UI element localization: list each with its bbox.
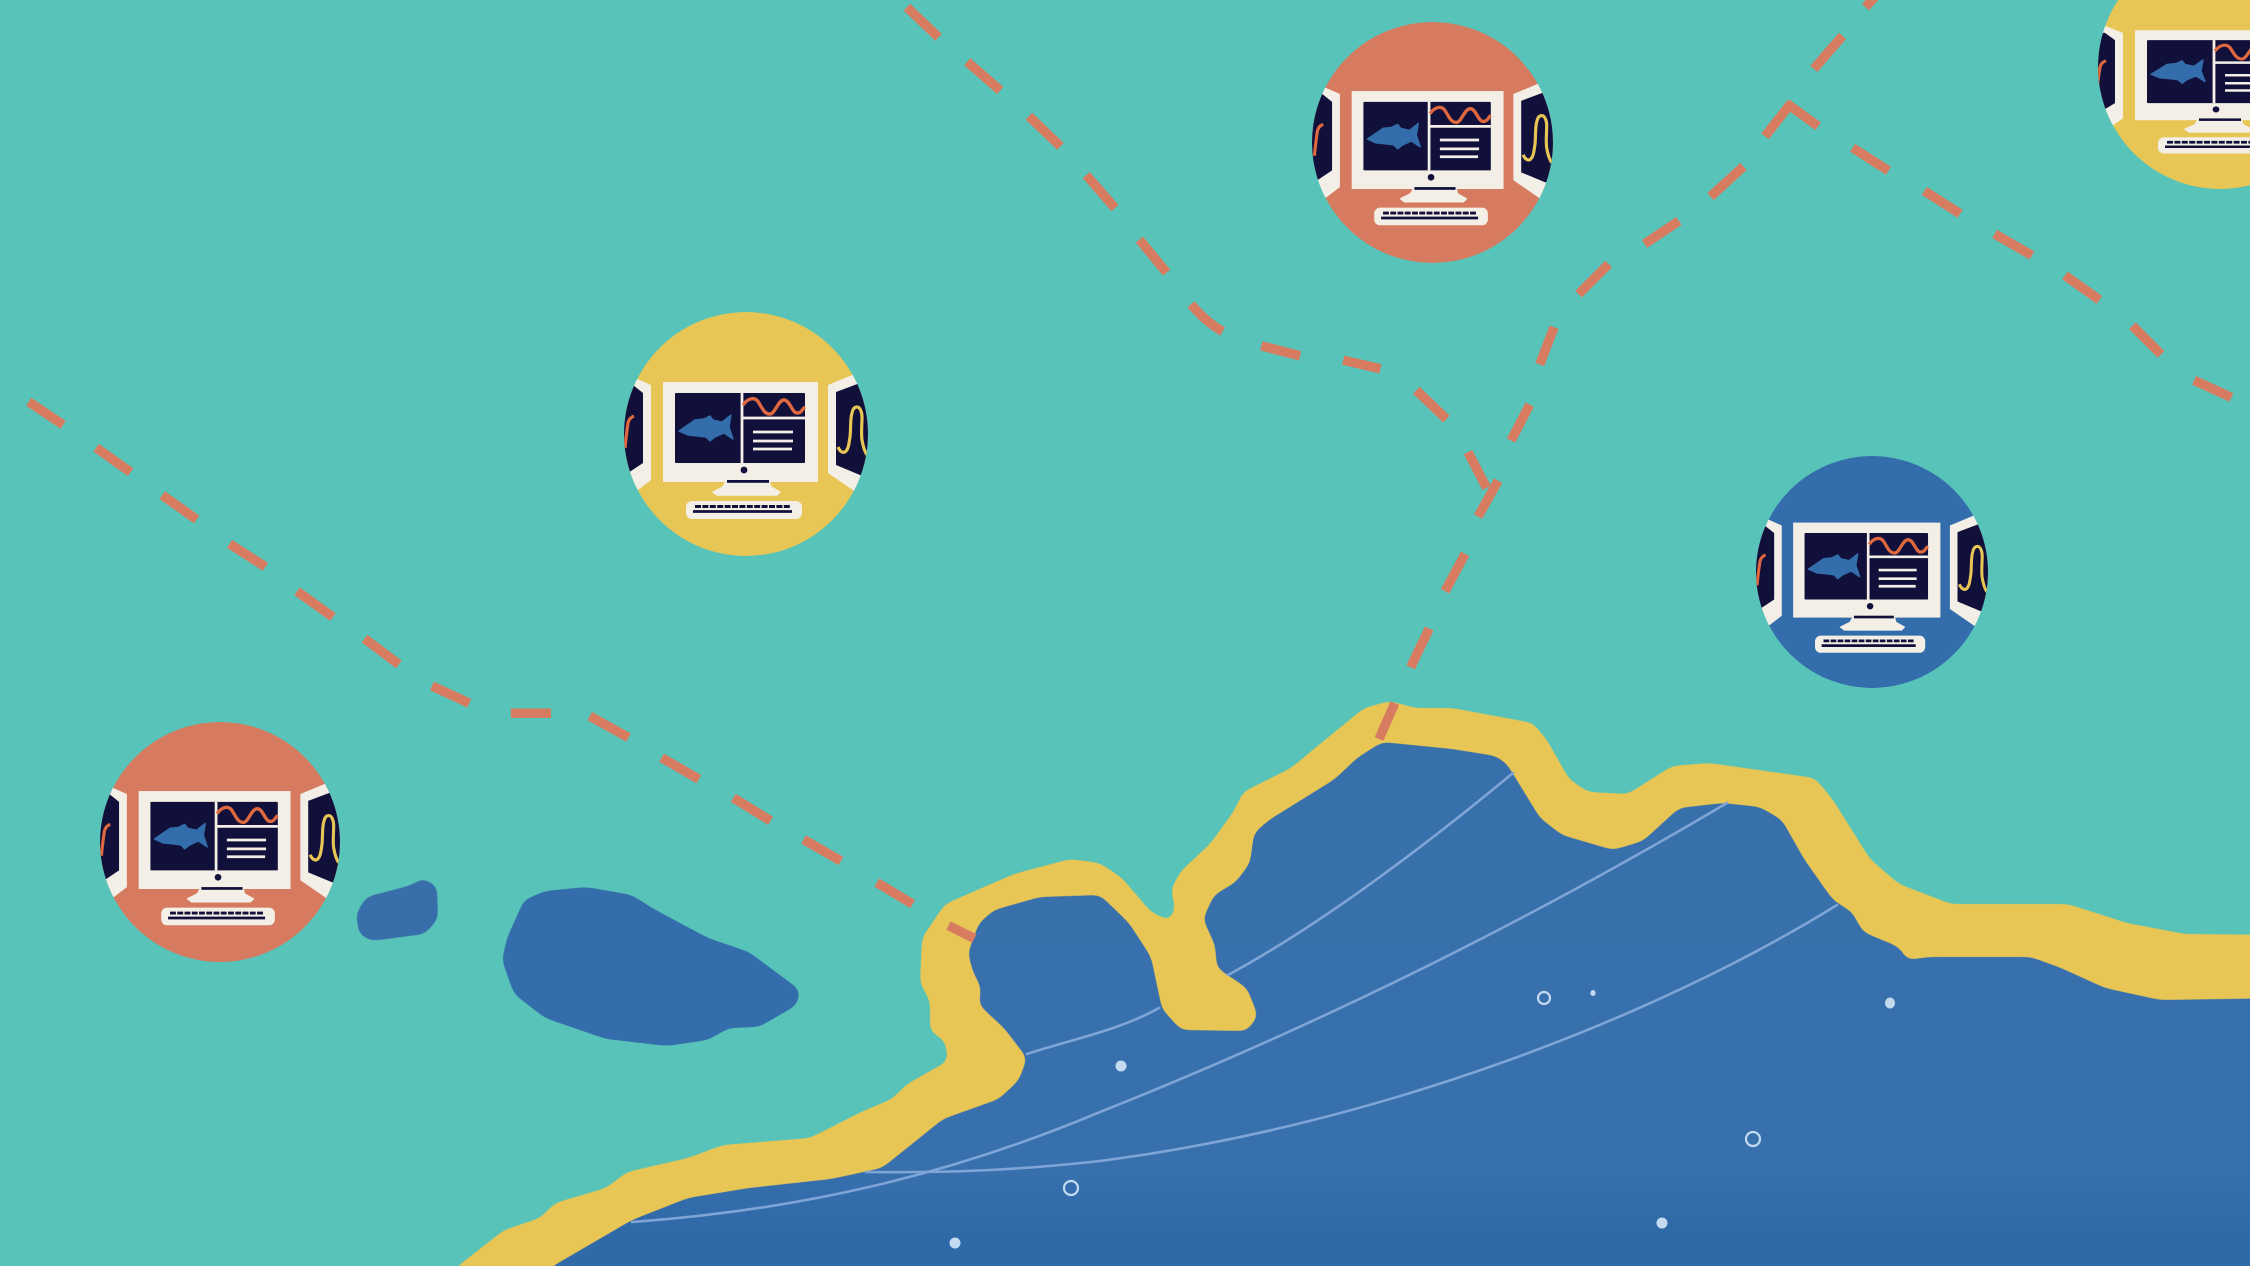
sand coastline (440, 701, 2250, 1266)
dashed route: west station to coast (29, 402, 974, 938)
station: yellow, centre (624, 312, 868, 556)
small island (356, 878, 438, 941)
dashed route: coast to north-east (1379, 0, 1877, 739)
deep sea (530, 742, 2250, 1266)
seabed markers (950, 990, 1895, 1248)
station: yellow, top right corner (2098, 0, 2250, 189)
large island (502, 887, 800, 1046)
station: salmon, left (100, 722, 340, 962)
station: blue, right (1756, 456, 1988, 688)
submarine cables (632, 773, 1837, 1222)
station: salmon, top centre (1312, 22, 1553, 263)
dashed route: north-east branch (1787, 103, 2231, 397)
dashed route: north to junction (907, 7, 1487, 488)
